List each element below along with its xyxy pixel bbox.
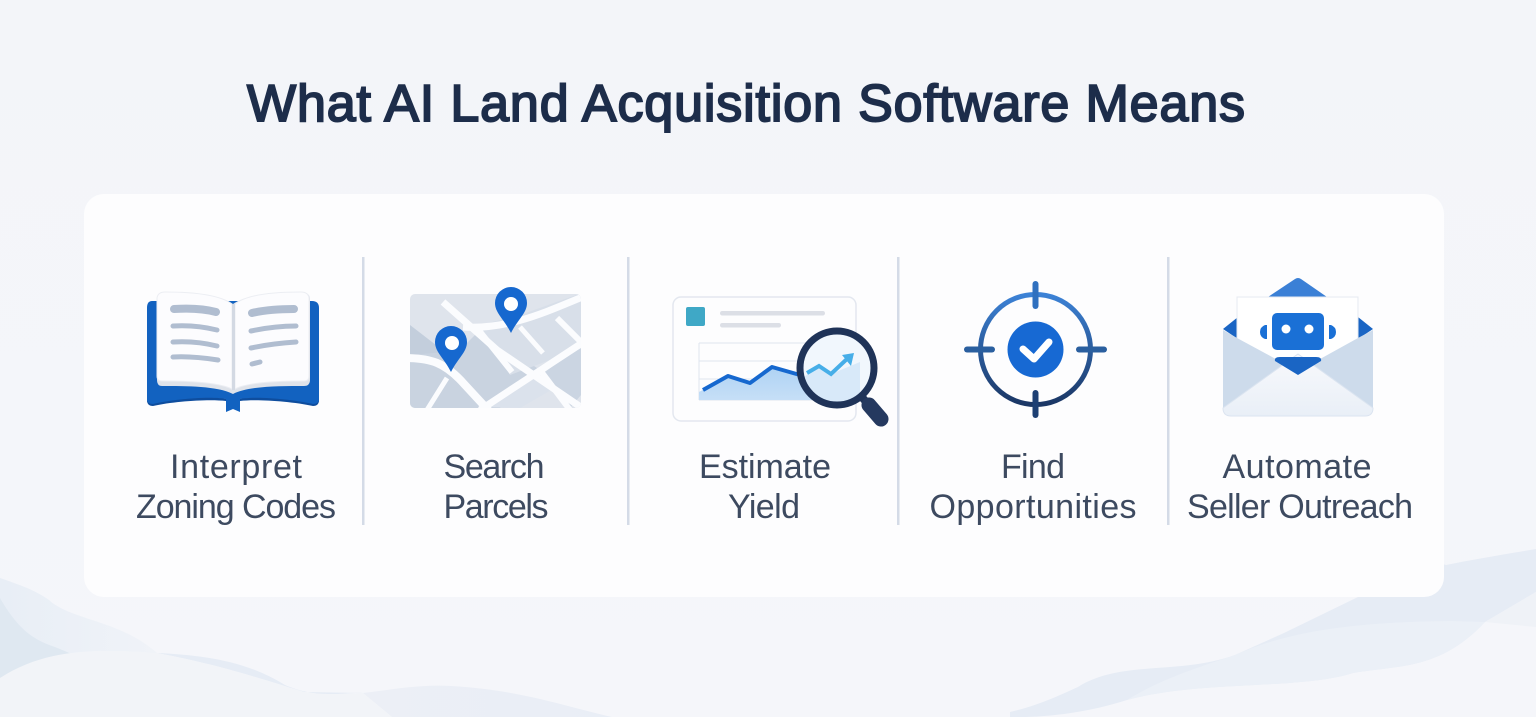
label: Find Opportunities: Find [1001, 448, 1065, 486]
column divider 4 [1167, 257, 1170, 525]
label: Interpret Zoning Codes: Zoning Codes [136, 488, 336, 526]
title: What AI Land Acquisition Software Means [247, 75, 1245, 133]
pin hole right [504, 297, 518, 311]
label: Search Parcels: Parcels [444, 488, 548, 526]
background waves [0, 540, 1536, 717]
label: Search Parcels: Search [444, 448, 544, 486]
label: Automate Seller Outreach: Automate [1222, 448, 1372, 486]
label: Search Parcels [444, 448, 548, 526]
label: Find Opportunities: Opportunities [930, 488, 1136, 526]
icon: map pin left [435, 326, 467, 372]
icon: open book [147, 292, 319, 412]
column divider 3 [897, 257, 900, 525]
label: Interpret Zoning Codes: Interpret [170, 448, 303, 486]
icon: envelope with robot [1223, 278, 1373, 416]
label: Automate Seller Outreach: Seller Outreach [1187, 488, 1413, 526]
label: Automate Seller Outreach [1187, 448, 1413, 526]
column divider 2 [627, 257, 630, 525]
column divider 1 [362, 257, 364, 525]
label: Estimate Yield: Estimate [699, 448, 831, 486]
icon: yield chart with magnifier [673, 297, 881, 421]
label: Estimate Yield [699, 448, 831, 526]
label: Estimate Yield: Yield [728, 488, 800, 526]
label: Find Opportunities [930, 448, 1136, 526]
icon: target with check [964, 281, 1107, 418]
label: Interpret Zoning Codes [136, 448, 336, 526]
icon: map pin right [495, 287, 527, 333]
panel: capabilities card [84, 194, 1444, 597]
icon: parcel map with pins [410, 287, 581, 408]
pin hole left [445, 336, 459, 350]
